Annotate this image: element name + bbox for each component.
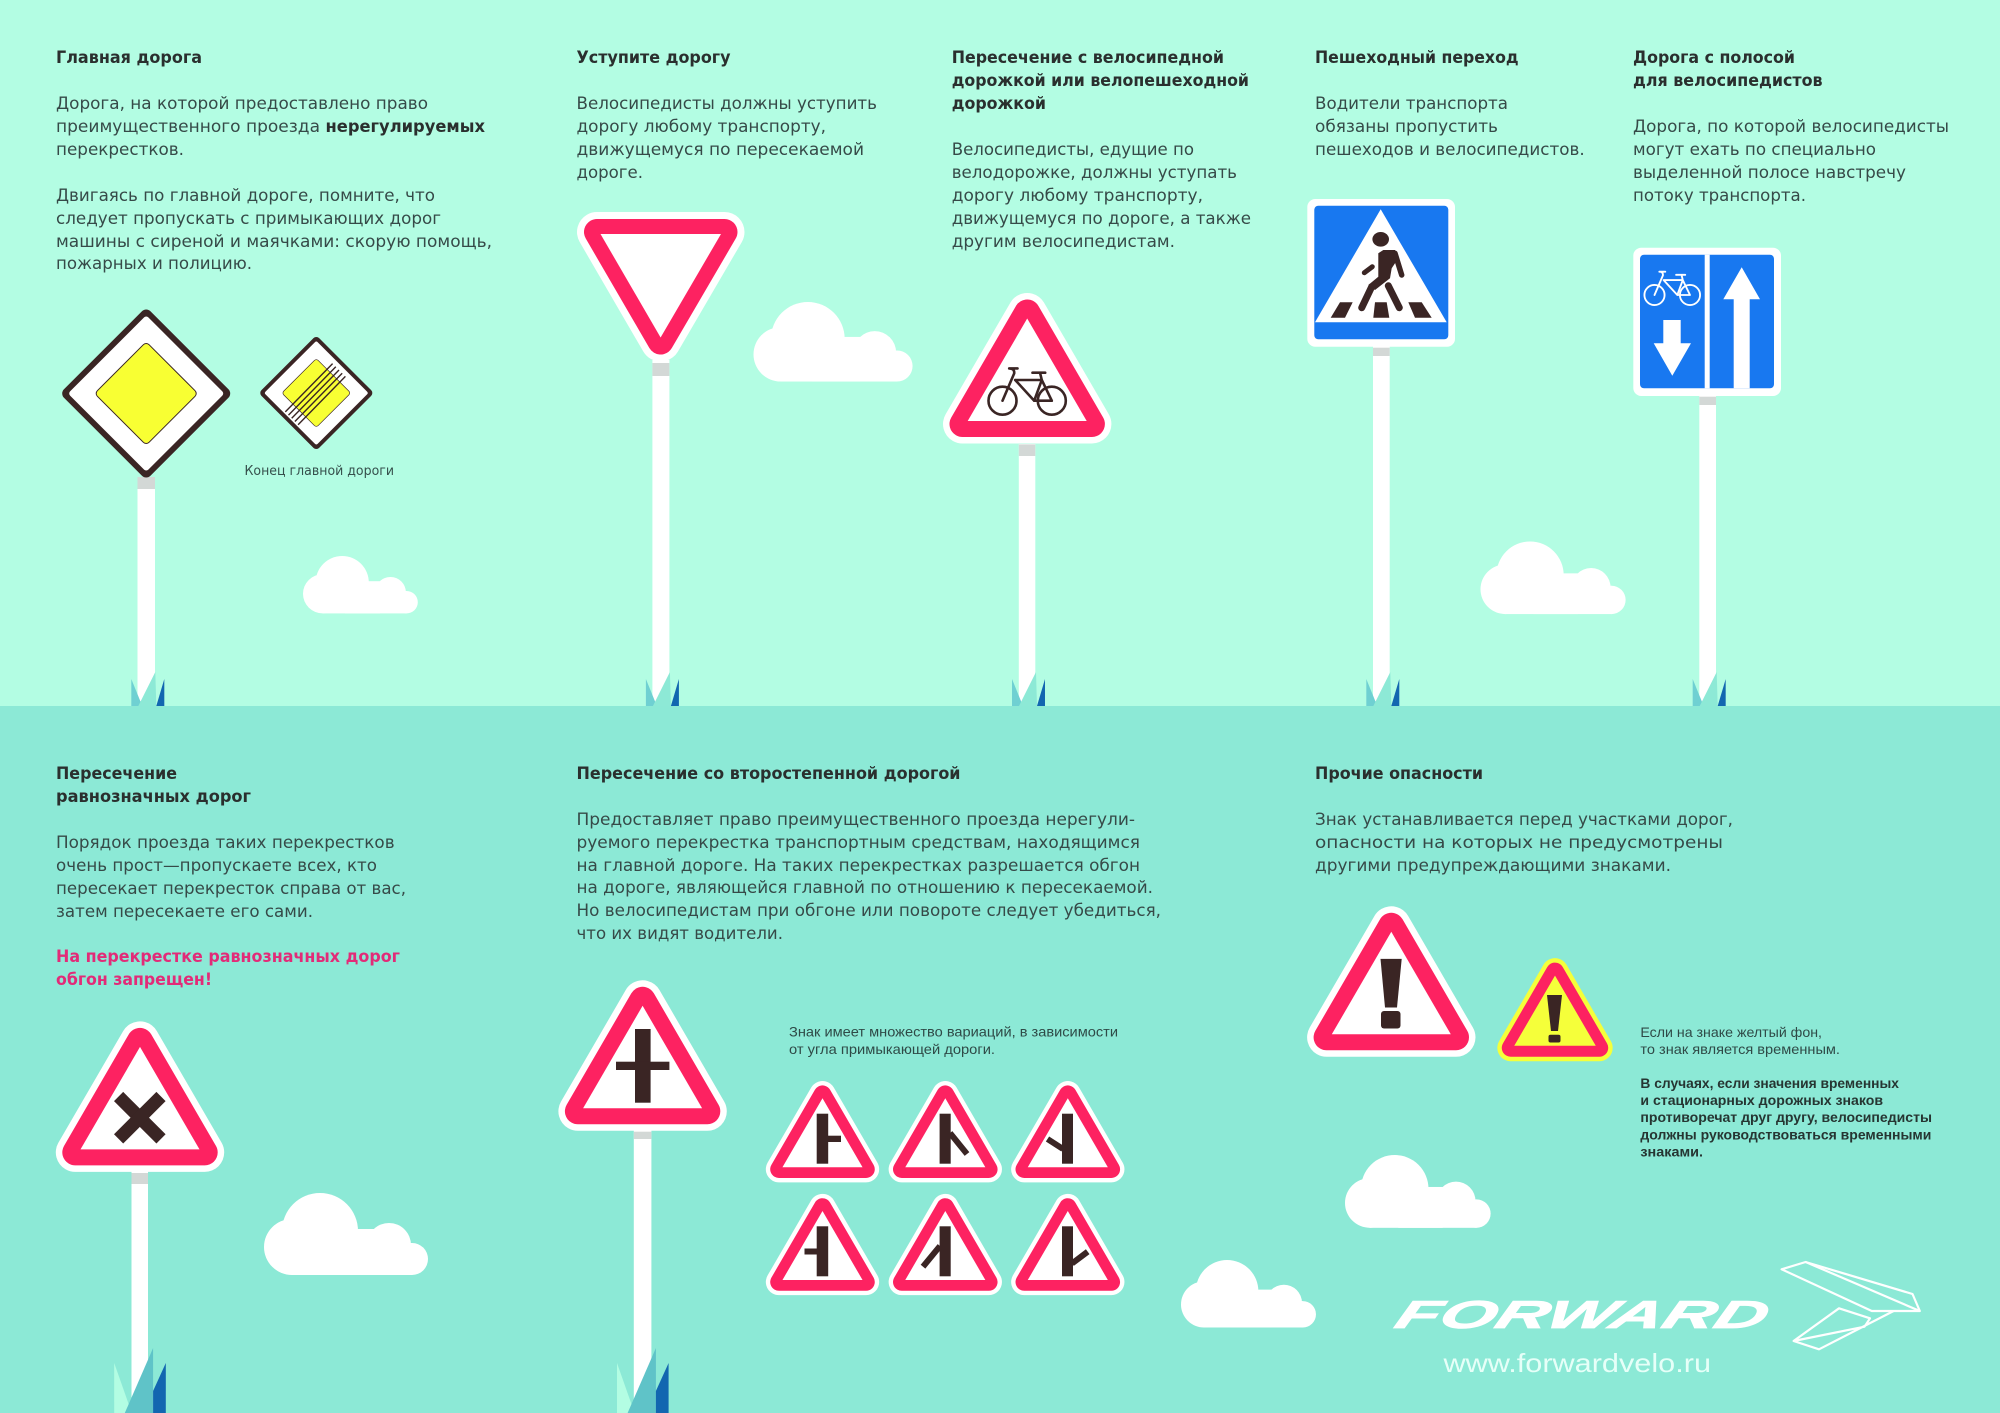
body text: Водители транспорта (1315, 94, 1508, 114)
heading: Пересечение с велосипедной (952, 48, 1224, 67)
body text: Знак устанавливается перед участками дорог, (1315, 810, 1733, 830)
panel: главная дорога (56, 48, 492, 706)
grass (131, 672, 164, 706)
heading (952, 48, 1249, 113)
icon: small exclamation mark (1547, 995, 1562, 1042)
variation sign 1 (779, 1094, 866, 1169)
warning text: На перекрестке равнозначных дорог (56, 947, 400, 966)
note: temporary signs: то знак является временным. (1640, 1041, 1840, 1057)
sign: bicycle warning (962, 312, 1092, 424)
heading: Пересечение со второстепенной дорогой (576, 764, 960, 783)
body text (56, 94, 492, 274)
background: ground (0, 706, 2000, 1413)
website url: www.forwardvelo.ru (1442, 1348, 1711, 1378)
body text (952, 140, 1251, 252)
body text: на дороге, являющейся главной по отношению к пересекаемой. (576, 878, 1153, 898)
body text: пешеходов и велосипедистов. (1315, 140, 1585, 160)
body text: Дорога, по которой велосипедисты (1633, 117, 1949, 137)
body text: дорогу любому транспорту, (576, 117, 826, 137)
icon: up arrow (1723, 267, 1760, 388)
body text: пожарных и полицию. (56, 254, 252, 274)
caption: sign variations (789, 1024, 1118, 1057)
sign: other dangers (1327, 926, 1456, 1037)
icon: down arrow (1654, 320, 1691, 376)
body text: Но велосипедистам при обгоне или повороте следует убедиться, (576, 901, 1161, 921)
icon: white bicycle (1644, 272, 1700, 305)
sign: minor road crossing (578, 1000, 707, 1111)
heading: равнозначных дорог (56, 787, 251, 806)
body text: Велосипедисты должны уступить (576, 94, 877, 114)
panel: пешеходный переход (1307, 48, 1585, 706)
cloud 3 (1480, 542, 1626, 614)
note: temporary signs priority: В случаях, если значения временных (1640, 1075, 1899, 1091)
body text: могут ехать по специально (1633, 140, 1876, 160)
body text: что их видят водители. (576, 924, 783, 944)
variation sign 2 (902, 1094, 989, 1169)
body text: другим велосипедистам. (952, 232, 1175, 252)
icon: paper plane (1782, 1262, 1920, 1349)
warning text (56, 947, 400, 989)
note: temporary signs priority: знаками. (1640, 1144, 1703, 1160)
caption: sign variations: Знак имеет множество вариаций, в зависимости (789, 1024, 1118, 1040)
body text (1633, 117, 1949, 206)
panel: прочие опасности (1315, 764, 1932, 1160)
heading: Уступите дорогу (576, 48, 731, 67)
body text: на главной дороге. На таких перекрестках разрешается обгон (576, 856, 1140, 876)
sign: yield (597, 232, 724, 342)
heading: дорожкой или велопешеходной (952, 71, 1249, 90)
body text: пересекает перекресток справа от вас, (56, 879, 406, 899)
body text: другими предупреждающими знаками. (1315, 856, 1671, 876)
warning text: обгон запрещен! (56, 970, 212, 989)
body text: очень прост—пропускаете всех, кто (56, 856, 377, 876)
sign: temporary danger (1511, 971, 1599, 1048)
sign: road with bicycle lane (1633, 248, 1781, 396)
body text: затем пересекаете его сами. (56, 902, 313, 922)
grass (114, 1348, 166, 1413)
heading: Главная дорога (56, 48, 202, 67)
body text: выделенной полосе навстречу (1633, 163, 1906, 183)
note: temporary signs priority (1640, 1075, 1932, 1160)
panel: уступите дорогу (576, 48, 877, 706)
background: sky (0, 0, 2000, 706)
body text: движущемуся по пересекаемой (576, 140, 864, 160)
note: temporary signs: Если на знаке желтый фон, (1640, 1024, 1822, 1040)
body text: Порядок проезда таких перекрестков (56, 833, 395, 853)
logo: forward (1389, 1262, 1920, 1378)
note: temporary signs priority: должны руководствоваться временными (1640, 1126, 1931, 1142)
icon: pedestrian (1331, 232, 1432, 318)
icon: cross road glyph (616, 1029, 669, 1103)
grass (646, 672, 679, 706)
pole (652, 360, 669, 706)
body text: опасности на которых не предусмотрены (1315, 833, 1723, 853)
body text: машины с сиреной и маячками: скорую помощь, (56, 232, 492, 252)
body text (576, 810, 1161, 944)
body text: Двигаясь по главной дороге, помните, что (56, 186, 435, 206)
body text: нерегулируемых (326, 117, 485, 136)
sign: equal crossroads (75, 1041, 205, 1152)
grass (1693, 672, 1726, 706)
heading: Пересечение (56, 764, 177, 783)
variation sign 4 (779, 1207, 866, 1282)
variation sign 5 (902, 1207, 989, 1282)
body text: Велосипедисты, едущие по (952, 140, 1194, 160)
heading: Пешеходный переход (1315, 48, 1519, 67)
cloud 2 (754, 302, 913, 382)
note: temporary signs (1640, 1024, 1840, 1057)
pole (1373, 346, 1390, 706)
icon: bicycle (988, 368, 1066, 415)
body text (576, 94, 877, 183)
icon: exclamation mark (1380, 959, 1402, 1028)
heading: для велосипедистов (1633, 71, 1823, 90)
sign: pedestrian crossing (1307, 199, 1455, 347)
body text: потоку транспорта. (1633, 186, 1806, 206)
heading: Прочие опасности (1315, 764, 1483, 783)
body text: обязаны пропустить (1315, 117, 1498, 137)
panel: пересечение со второстепенной дорогой (576, 764, 1161, 1413)
note: temporary signs priority: и стационарных дорожных знаков (1640, 1092, 1883, 1108)
grass (1366, 672, 1399, 706)
body text: дорогу любому транспорту, (952, 186, 1203, 206)
body text: дороге. (576, 163, 643, 183)
heading: дорожкой (952, 94, 1046, 113)
pole (1699, 395, 1716, 706)
body text: Дорога, на которой предоставлено право (56, 94, 428, 114)
sign: end of main road (264, 341, 368, 445)
heading (56, 764, 251, 806)
cloud 1 (303, 556, 418, 613)
logo wordmark: FORWARD (1389, 1293, 1776, 1337)
caption: end of main road: Конец главной дороги (244, 464, 394, 479)
body text (1315, 94, 1585, 160)
pole (634, 1129, 651, 1413)
note: temporary signs priority: противоречат друг другу, велосипедисты (1640, 1109, 1932, 1125)
grass (1012, 672, 1045, 706)
heading (1633, 48, 1823, 90)
caption: sign variations: от угла примыкающей дороги. (789, 1041, 995, 1057)
panel: пересечение с велосипедной дорожкой (952, 48, 1251, 706)
pole (1019, 444, 1035, 706)
grass (617, 1348, 669, 1413)
body text: следует пропускать с примыкающих дорог (56, 209, 441, 229)
body text: Предоставляет право преимущественного проезда нерегули- (576, 810, 1135, 830)
icon: cross (119, 1096, 161, 1139)
pole (132, 1170, 148, 1413)
heading: Дорога с полосой (1633, 48, 1795, 67)
body text: преимущественного проезда (56, 117, 320, 137)
body text: руемого перекрестка транспортным средствам, находящимся (576, 833, 1140, 853)
variation sign 6 (1024, 1207, 1111, 1282)
body text (56, 833, 406, 922)
cloud 4 (264, 1193, 428, 1275)
sign: main road (68, 316, 224, 472)
pole (138, 477, 155, 706)
cloud 5 (1345, 1155, 1491, 1228)
panel: пересечение равнозначных дорог (56, 764, 406, 1413)
body text (1315, 810, 1733, 876)
panel: дорога с полосой для велосипедистов (1633, 48, 1949, 706)
body text: велодорожке, должны уступать (952, 163, 1237, 183)
body text: движущемуся по дороге, а также (952, 209, 1251, 229)
body text: перекрестков. (56, 140, 184, 160)
cloud 6 (1181, 1260, 1316, 1327)
variation sign 3 (1024, 1094, 1111, 1169)
